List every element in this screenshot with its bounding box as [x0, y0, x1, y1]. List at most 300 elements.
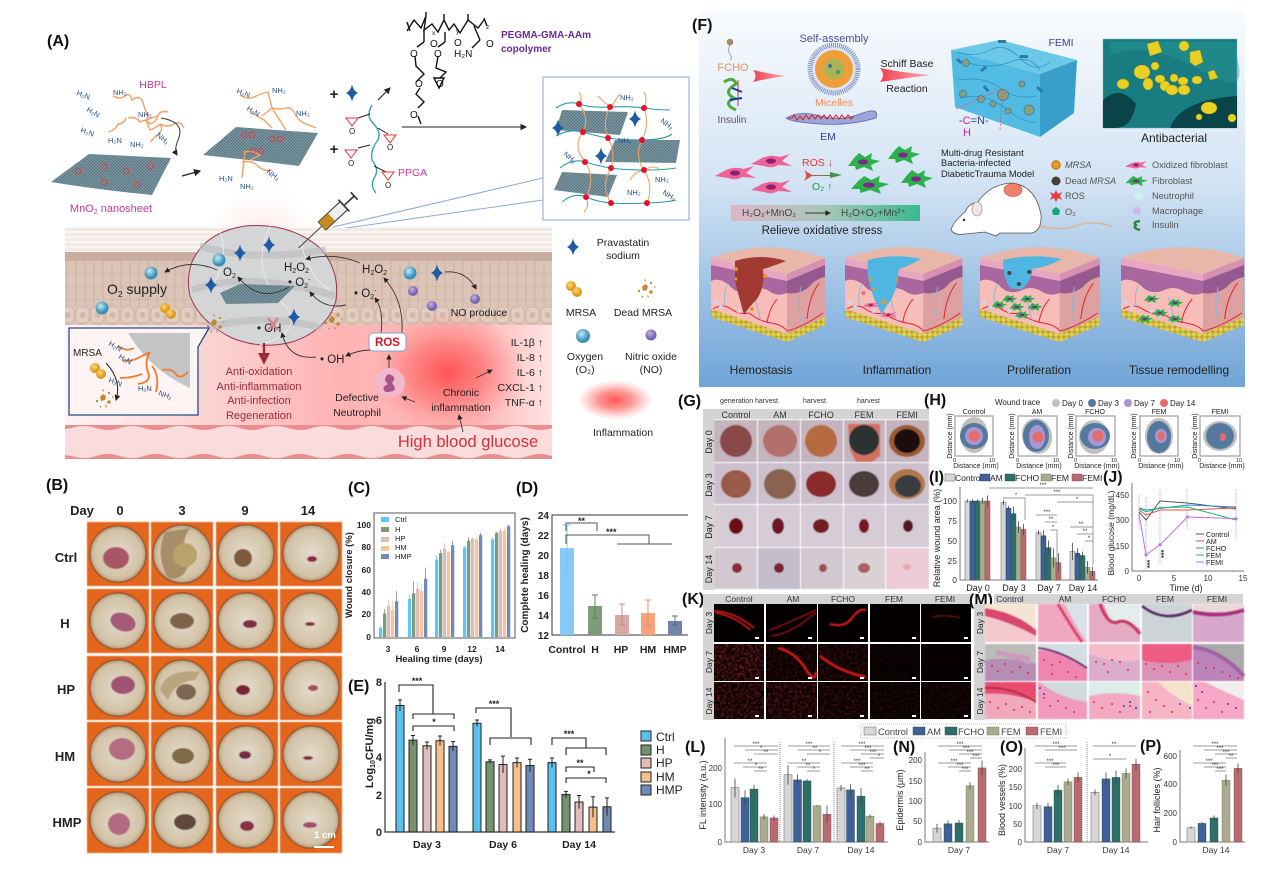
- significance lines: ***: [752, 742, 760, 748]
- mini chart: FCHO: 0: [1074, 458, 1077, 464]
- significance brackets: [566, 516, 672, 544]
- y ticks: 75: [948, 516, 957, 526]
- x tick labels: 9: [442, 644, 447, 654]
- left band with days: Day 0: [704, 430, 714, 454]
- panel C: wound closure chart: [344, 480, 515, 665]
- panel O: blood vessels chart: [997, 739, 1148, 855]
- label: EM: EM: [820, 131, 836, 143]
- list: cytokines: CXCL-1 ↑: [497, 382, 543, 394]
- x label: Day 7: [948, 845, 970, 855]
- panel F: FEMI hydrogel schematic: [692, 12, 1245, 387]
- legend: FEM: [1206, 551, 1221, 560]
- label: Antibacterial: Antibacterial: [1141, 131, 1207, 145]
- x tick labels: 3: [386, 644, 391, 654]
- significance brackets: ***: [1039, 483, 1047, 489]
- mini chart: AM: [1009, 409, 1062, 470]
- follicle markers: [990, 660, 1238, 712]
- x labels: [413, 839, 596, 851]
- icon: HBPL branched polymer: H₂N: [79, 125, 95, 139]
- line: FCHO: [1139, 505, 1236, 510]
- text: therapeutic effects: [217, 366, 301, 422]
- axis tick labels: 100: [357, 520, 371, 530]
- panel P: hair follicles chart: [1140, 738, 1245, 855]
- legend: wound trace: Wound trace: [995, 398, 1041, 407]
- significance marks: ***: [1161, 550, 1168, 558]
- legend: schematic key: sodium: [606, 250, 640, 262]
- inset: MRSA killing: MRSA: [73, 348, 102, 359]
- legend: schematic key: Oxygen: [567, 351, 603, 363]
- legend: cells: Oxidized fibroblast: [1152, 160, 1228, 170]
- heading: panel L label: (L): [685, 739, 705, 756]
- mini chart: FCHO: Distance (mm): [1068, 413, 1075, 459]
- y ticks: 200: [909, 756, 923, 765]
- x labels: Day 7: [797, 845, 819, 855]
- bar chart: follicles: [1187, 763, 1242, 842]
- significance brackets: **: [578, 516, 586, 526]
- left band with days: Day 7: [975, 651, 985, 673]
- legend: [641, 730, 683, 797]
- list: cytokines: IL-8 ↑: [517, 352, 543, 364]
- axis tick labels: 40: [362, 587, 371, 597]
- legend: species: MRSA: [1065, 160, 1092, 170]
- y ticks: [376, 677, 383, 839]
- header band: Control: [996, 594, 1024, 604]
- significance lines: ***: [805, 742, 813, 748]
- legend: FEMI: [1082, 473, 1102, 483]
- x labels: Day 3: [743, 845, 765, 855]
- labels: healing stages: Tissue remodelling: [1129, 363, 1229, 377]
- y ticks: 200: [709, 764, 723, 773]
- significance lines: ***: [1211, 763, 1219, 769]
- chart frame: [374, 513, 515, 638]
- legend: cells: [1125, 160, 1228, 230]
- mini chart: FEMI: Distance (mm): [1199, 463, 1245, 470]
- x labels: Day 3: [1002, 583, 1026, 593]
- x labels: Control: [548, 644, 586, 656]
- x tick labels: [386, 644, 505, 654]
- significance brackets: ***: [1043, 510, 1051, 516]
- axis tick labels: 0: [366, 632, 371, 642]
- significance lines: [734, 742, 884, 773]
- x labels: Day 6: [489, 839, 517, 851]
- icon: EM sheet: [786, 111, 877, 124]
- y ticks: 14: [538, 611, 549, 622]
- legend: schematic key: [566, 237, 677, 439]
- callout: ROS box: [369, 333, 406, 351]
- molecule: PEGMA-GMA-AAm copolymer: O: [454, 38, 462, 49]
- y ticks: 300: [1116, 516, 1130, 525]
- mini chart: Control: Distance (mm): [953, 463, 999, 470]
- x tick labels: 12: [467, 644, 477, 654]
- shared legend for L-P charts: FEM: [1001, 727, 1021, 737]
- x ticks: 10: [1204, 574, 1213, 583]
- column headers: 14: [301, 503, 316, 518]
- label: FEMI: FEMI: [1048, 37, 1074, 49]
- molecule: PPGA chain: O: [385, 181, 391, 190]
- y axis title: Complete healing (days): [520, 517, 531, 633]
- significance brackets: *: [1052, 525, 1055, 531]
- x label: Day 14: [1203, 845, 1230, 855]
- scale bar: 1 cm: [314, 830, 336, 841]
- image: antibacterial SEM: [1103, 39, 1240, 128]
- y ticks: 450: [1116, 491, 1130, 500]
- icon: defective neutrophil: [375, 368, 405, 398]
- legend: Ctrl: [395, 515, 407, 524]
- significance brackets: ***: [412, 676, 423, 686]
- significance lines: ***: [1052, 763, 1060, 769]
- heading: panel P label: (P): [1140, 738, 1161, 755]
- legend: Control: [1206, 530, 1230, 539]
- mini chart: AM: Distance (mm): [1016, 463, 1062, 470]
- axes: [1025, 748, 1148, 842]
- significance lines: ***: [1046, 759, 1054, 765]
- y ticks: 8: [376, 677, 382, 689]
- arrow: to self-assembly: [753, 70, 786, 82]
- x labels: Day 7: [1037, 583, 1061, 593]
- significance brackets: ***: [489, 699, 500, 709]
- significance lines: ***: [1222, 750, 1230, 756]
- text: therapeutic effects: Anti-oxidation: [226, 366, 292, 378]
- heading: panel N label: (N): [893, 739, 915, 756]
- significance lines: *: [1109, 754, 1112, 760]
- heading: panel O label: (O): [1000, 739, 1023, 756]
- header: timeline: generation harvest: [720, 398, 778, 405]
- significance lines: *: [813, 767, 816, 773]
- labels: healing stages: Proliferation: [1007, 363, 1071, 377]
- molecule: PEGMA-GMA-AAm copolymer: [407, 12, 494, 124]
- photo grid: [714, 420, 929, 589]
- label: defective neutrophil: Defective: [335, 392, 379, 404]
- panel E: bacterial load chart: [348, 676, 683, 851]
- icon: polymer on nanosheet complex: H₂N: [245, 104, 261, 119]
- column headers: 9: [241, 503, 249, 518]
- mini chart: AM: 0: [1016, 458, 1019, 464]
- mini chart: Control: 10: [989, 458, 995, 464]
- chemical species labels: 2: [383, 270, 387, 277]
- row labels: HMP: [53, 815, 82, 830]
- y ticks: [943, 496, 957, 585]
- label: MnO2 nanosheet: MnO: [70, 203, 94, 215]
- chemical species labels: H: [284, 262, 292, 274]
- legend: wound trace: Day 14: [1170, 399, 1196, 408]
- chemical species labels: • OH: [257, 323, 281, 335]
- row labels: H: [60, 616, 70, 631]
- legend: cells: Neutrophil: [1152, 191, 1194, 201]
- reaction bar: H₂O₂+MnO₂: [742, 208, 796, 219]
- left band with days: Day 7: [704, 515, 714, 539]
- plus sign: +: [330, 141, 339, 158]
- icon: polymer on nanosheet complex: H₂N: [219, 174, 233, 183]
- axes: [960, 487, 1098, 580]
- legend: wound trace: Day 3: [1098, 399, 1119, 408]
- y axis title: CFU/mg: [364, 718, 376, 760]
- molecule: PEGMA-GMA-AAm copolymer: O: [410, 49, 418, 60]
- legend: wound trace: Day 7: [1134, 399, 1155, 408]
- y ticks: 22: [538, 531, 549, 542]
- x ticks: 0: [1137, 574, 1142, 583]
- legend: wound trace: [995, 398, 1196, 408]
- panel N: epidermis chart: [893, 739, 989, 855]
- mini chart: FEMI: 0: [1198, 458, 1201, 464]
- significance brackets: ***: [564, 729, 575, 739]
- chart frame: [552, 515, 688, 635]
- heading: panel K label: (K): [682, 591, 704, 608]
- panel: hydrogel network box: NH₂: [562, 150, 578, 165]
- icon: polymer on nanosheet complex: NH₂: [272, 86, 286, 95]
- x ticks: [1137, 574, 1248, 583]
- significance lines: **: [1229, 754, 1234, 760]
- dotted separators: [780, 742, 834, 842]
- legend: FCHO: [1206, 544, 1227, 553]
- legend: cells: Macrophage: [1152, 206, 1203, 216]
- y ticks: 0: [1125, 567, 1130, 576]
- icon: blocked OH mark: [268, 318, 278, 330]
- molecule: PPGA chain: [345, 105, 396, 193]
- legend: HM: [656, 770, 675, 784]
- list: cytokines: TNF-α ↑: [505, 397, 543, 409]
- label: ROS down: ROS ↓: [802, 157, 833, 169]
- molecule: PPGA chain: O: [387, 143, 393, 152]
- x labels: HM: [640, 644, 656, 656]
- icon: MRSA in skin: [160, 303, 176, 319]
- legend: Control: [955, 473, 983, 483]
- text: therapeutic effects: Anti-infection: [227, 395, 291, 407]
- label: O2 supply: O: [107, 281, 118, 297]
- header band with group names: FEM: [854, 410, 874, 420]
- label: copolymer name: copolymer: [501, 44, 552, 55]
- chemical species labels: 2: [370, 294, 374, 301]
- panel L: fluorescence intensity chart: [685, 738, 888, 855]
- label: defective neutrophil: [333, 392, 381, 419]
- labels: healing stages: [730, 363, 1229, 377]
- y ticks: 6: [376, 715, 382, 727]
- line: FEMI: [1139, 514, 1238, 556]
- skin block: inflammation: [845, 247, 962, 342]
- x tick labels: 14: [495, 644, 505, 654]
- significance brackets: **: [1079, 522, 1084, 528]
- y ticks: 100: [709, 800, 723, 809]
- significance lines: ***: [1216, 767, 1224, 773]
- mini chart: FEM: Distance (mm): [1138, 463, 1184, 470]
- heading: panel F label: (F): [692, 17, 712, 34]
- chemical species labels: 2: [304, 283, 308, 290]
- significance lines: ***: [956, 742, 964, 748]
- shared legend for L-P charts: FCHO: [958, 727, 984, 737]
- icon: polymer on nanosheet complex: NH₂: [296, 109, 310, 118]
- significance lines: ***: [858, 763, 866, 769]
- mini chart: FEMI: 10: [1236, 458, 1242, 464]
- header band: AM: [787, 594, 799, 604]
- arrow: sheet to complex: [182, 171, 200, 176]
- y ticks: 16: [538, 591, 549, 602]
- inset: MRSA killing: [69, 328, 209, 415]
- mini chart: Control: 0: [953, 458, 956, 464]
- significance lines: *: [878, 754, 881, 760]
- label: NO produce: NO produce: [451, 307, 507, 319]
- mini chart: FCHO: 10: [1111, 458, 1117, 464]
- x ticks: 15: [1239, 574, 1248, 583]
- left band with days: [703, 604, 714, 720]
- header band with group names: AM: [773, 410, 787, 420]
- label: Insulin: Insulin: [718, 115, 746, 126]
- icons: dead MRSA clusters: [207, 311, 343, 333]
- molecule: PEGMA-GMA-AAm copolymer: x: [432, 30, 436, 37]
- header band: [994, 594, 1243, 604]
- label: Micelles: Micelles: [815, 97, 853, 109]
- significance lines: ***: [869, 750, 877, 756]
- panel: hydrogel network box: NH₂: [661, 188, 677, 203]
- y ticks: [538, 511, 549, 642]
- significance lines: **: [759, 767, 764, 773]
- heading: panel D label: (D): [516, 480, 538, 497]
- legend: schematic key: (O₂): [575, 364, 595, 376]
- x axis title: Healing time (days): [395, 654, 483, 665]
- y axis title: Log: [364, 768, 376, 788]
- header band: Control: [725, 594, 753, 604]
- x axis title: Time (d): [1169, 583, 1203, 593]
- x labels: [548, 644, 687, 656]
- significance lines: ***: [1211, 742, 1219, 748]
- mini chart: Control: Distance (mm): [947, 413, 954, 459]
- x labels: Day 14: [1103, 845, 1130, 855]
- arrow: HBPL to sheet: [161, 118, 180, 155]
- y ticks: [1116, 491, 1130, 576]
- x labels: Day 14: [1069, 583, 1097, 593]
- list: cytokines: [497, 337, 543, 409]
- icons: drug stars: [205, 236, 443, 326]
- significance lines: ***: [950, 759, 958, 765]
- significance lines: ***: [853, 759, 861, 765]
- icon: HBPL branched polymer: H₂N: [108, 136, 122, 145]
- reaction arrows: [165, 256, 492, 432]
- legend: [381, 515, 412, 561]
- label: defective neutrophil: Neutrophil: [333, 407, 381, 419]
- panel background: [699, 12, 1245, 387]
- label: chronic inflammation: inflammation: [431, 402, 491, 414]
- legend: schematic key: Dead MRSA: [614, 307, 672, 319]
- label: Self-assembly: Self-assembly: [799, 33, 869, 45]
- panel A: hydrogel mechanism: [47, 12, 689, 459]
- mini chart: Control: Control: [963, 409, 986, 416]
- significance lines: ***: [858, 742, 866, 748]
- dotted separator: [1086, 742, 1088, 842]
- inflammation glow: [370, 312, 526, 432]
- label: FCHO: FCHO: [717, 62, 749, 74]
- heading: panel M label: (M): [969, 592, 993, 609]
- axis tick labels: 60: [362, 565, 371, 575]
- icon: HBPL branched polymer: [75, 88, 184, 149]
- legend: schematic key: Nitric oxide: [625, 351, 677, 363]
- y ticks: 200: [1009, 765, 1023, 774]
- legend: schematic key: MRSA: [566, 307, 596, 319]
- significance lines: ***: [1205, 759, 1213, 765]
- axes: [725, 738, 888, 842]
- row labels: [53, 550, 82, 830]
- axes: [1180, 750, 1245, 842]
- y ticks: 150: [909, 777, 923, 786]
- x ticks: 5: [1172, 574, 1177, 583]
- icon: HBPL branched polymer: NH₂: [130, 140, 144, 149]
- significance lines: *: [760, 746, 763, 752]
- text: therapeutic effects: Anti-inflammation: [217, 381, 301, 393]
- chemical species labels: -: [374, 288, 377, 295]
- molecule: PEGMA-GMA-AAm copolymer: y: [456, 28, 460, 35]
- column headers: Day: [70, 503, 95, 518]
- heading: panel E label: (E): [348, 678, 369, 695]
- label: Schiff base bond: [959, 115, 989, 139]
- legend: schematic key: (NO): [640, 364, 662, 376]
- mini chart: FCHO: [1068, 409, 1120, 470]
- legend: AM: [1206, 537, 1217, 546]
- labels: healing stages: Inflammation: [863, 363, 931, 377]
- icon: polymer on nanosheet complex: [203, 86, 318, 191]
- text: model description: Multi-drug Resistant: [941, 148, 1024, 158]
- chemical species labels: • O: [354, 288, 370, 300]
- label: MnO2 nanosheet: nanosheet: [98, 203, 152, 215]
- left band with days: Day 3: [704, 612, 714, 634]
- y ticks: 50: [948, 536, 957, 546]
- axes: [1132, 483, 1244, 571]
- blood vessel band: [65, 425, 552, 459]
- significance lines: **: [764, 750, 769, 756]
- significance lines: ***: [956, 763, 964, 769]
- mini chart: FEMI: Distance (mm): [1192, 413, 1199, 459]
- header band with group names: FEMI: [896, 410, 918, 420]
- legend: schematic key: Inflammation: [593, 427, 653, 439]
- x labels: Day 14: [562, 839, 596, 851]
- mini chart: FEM: Distance (mm): [1131, 413, 1138, 459]
- icon: syringe: [293, 190, 360, 254]
- molecule: PEGMA-GMA-AAm copolymer: H₂N: [454, 49, 472, 60]
- panel: hydrogel network box: NH₂: [655, 175, 669, 184]
- y ticks: 150: [1116, 542, 1130, 551]
- label: Schiff base bond: -C=N-: [959, 115, 989, 127]
- list: cytokines: IL-6 ↑: [517, 367, 543, 379]
- significance brackets: ***: [606, 527, 617, 537]
- header band with group names: FCHO: [808, 410, 834, 420]
- y ticks: [1009, 765, 1023, 847]
- significance lines: *: [819, 750, 822, 756]
- header band: FCHO: [1102, 594, 1126, 604]
- image grid: [985, 604, 1244, 719]
- inset: MRSA killing: H₂N: [117, 352, 133, 367]
- legend: FEMI: [1206, 558, 1223, 567]
- significance lines: ***: [1216, 746, 1224, 752]
- text: therapeutic effects: Regeneration: [226, 410, 292, 422]
- icons: fibroblasts: [848, 146, 933, 194]
- label: Reaction: Reaction: [886, 83, 928, 95]
- significance lines: [1035, 742, 1136, 769]
- skin block: proliferation: [980, 247, 1100, 342]
- bar chart: log CFU: [396, 700, 611, 832]
- chemical species labels: [223, 262, 387, 366]
- y ticks: 100: [909, 797, 923, 806]
- legend: HM: [395, 543, 407, 552]
- icon: HBPL branched polymer: NH₂: [155, 131, 171, 146]
- mini chart: AM: AM: [1032, 409, 1042, 416]
- x labels: HP: [614, 644, 628, 656]
- y ticks: 0: [718, 838, 723, 847]
- panel D: complete healing chart: [516, 480, 688, 656]
- left band with days: Day 14: [975, 687, 985, 714]
- y ticks: 50: [1013, 820, 1023, 829]
- significance marks: [1147, 550, 1168, 568]
- left band with days: Day 7: [704, 651, 714, 673]
- arrow: to copolymer: [378, 88, 390, 100]
- legend: [945, 473, 1102, 483]
- y ticks: 12: [538, 631, 549, 642]
- significance brackets: [989, 483, 1093, 565]
